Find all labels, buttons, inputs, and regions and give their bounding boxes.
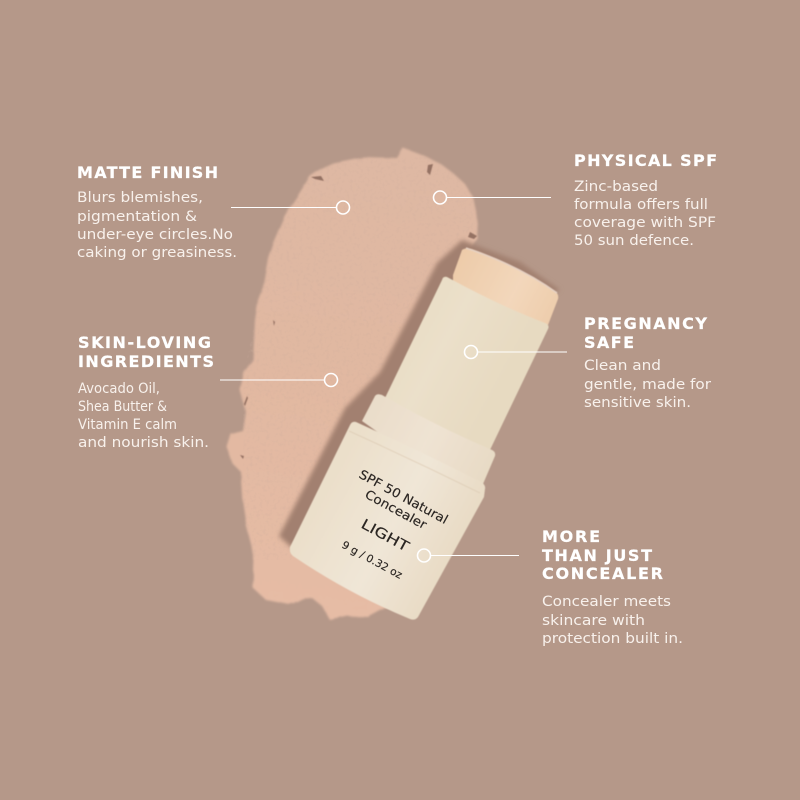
- product label: [340, 466, 451, 582]
- heading: PREGNANCY: [584, 314, 707, 333]
- description: pigmentation &: [77, 209, 197, 225]
- cap: [290, 422, 485, 620]
- collar: [362, 394, 495, 484]
- heading: MATTE FINISH: [77, 163, 218, 182]
- description: Avocado Oil,: [78, 381, 160, 397]
- description: Concealer meets: [542, 594, 671, 610]
- pointer: matte finish: [231, 201, 350, 214]
- heading: INGREDIENTS: [78, 352, 214, 371]
- pointer: pregnancy safe: [464, 346, 567, 358]
- description: gentle, made for: [584, 377, 711, 393]
- description: and nourish skin.: [78, 435, 209, 451]
- tube shadow: [279, 240, 560, 548]
- description: Zinc-based: [574, 179, 658, 195]
- heading: [78, 333, 214, 371]
- pointer: physical spf: [434, 191, 551, 204]
- heading: CONCEALER: [542, 564, 663, 583]
- label: weight: 9 g / 0.32 oz: [340, 539, 405, 582]
- product swatch: [227, 148, 478, 620]
- swatch texture: [243, 157, 476, 560]
- label: product name line 2: Concealer: [363, 486, 430, 533]
- heading: SKIN-LOVING: [78, 333, 211, 352]
- heading: SAFE: [584, 333, 634, 352]
- description: 50 sun defence.: [574, 233, 694, 249]
- description: under-eye circles.No: [77, 227, 233, 243]
- description: Shea Butter &: [78, 399, 167, 415]
- stick top rim highlight: [466, 248, 557, 293]
- description: Blurs blemishes,: [77, 190, 203, 206]
- pointer: skin-loving ingredients: [220, 374, 338, 386]
- description: Clean and: [584, 358, 661, 374]
- callout: more than just concealer: [542, 527, 683, 647]
- stick body: [453, 248, 558, 325]
- description: protection built in.: [542, 631, 683, 647]
- heading: PHYSICAL SPF: [574, 151, 717, 170]
- heading: [542, 527, 663, 583]
- heading: MORE: [542, 527, 600, 546]
- description: [584, 358, 711, 411]
- swatch dark flecks: [240, 164, 477, 459]
- callout: pregnancy safe: [584, 314, 711, 411]
- callout: physical spf: [574, 151, 717, 249]
- callout: matte finish: [77, 163, 237, 261]
- pointer: more than just concealer: [418, 549, 519, 562]
- description: [542, 594, 683, 647]
- label: product name line 1: SPF 50 Natural: [357, 466, 451, 527]
- heading: [584, 314, 707, 352]
- heading: THAN JUST: [542, 546, 652, 565]
- description: [574, 179, 716, 249]
- description: skincare with: [542, 613, 645, 629]
- description: [78, 381, 209, 451]
- label: shade: LIGHT: [358, 516, 412, 556]
- cap top groove: [349, 431, 480, 493]
- description: formula offers full: [574, 197, 708, 213]
- callout: skin-loving ingredients: [78, 333, 214, 451]
- description: coverage with SPF: [574, 215, 716, 231]
- description: caking or greasiness.: [77, 245, 237, 261]
- description: sensitive skin.: [584, 395, 691, 411]
- upper tube: [385, 277, 549, 452]
- description: Vitamin E calm: [78, 417, 177, 433]
- description: [77, 190, 237, 261]
- concealer stick product: [290, 248, 558, 620]
